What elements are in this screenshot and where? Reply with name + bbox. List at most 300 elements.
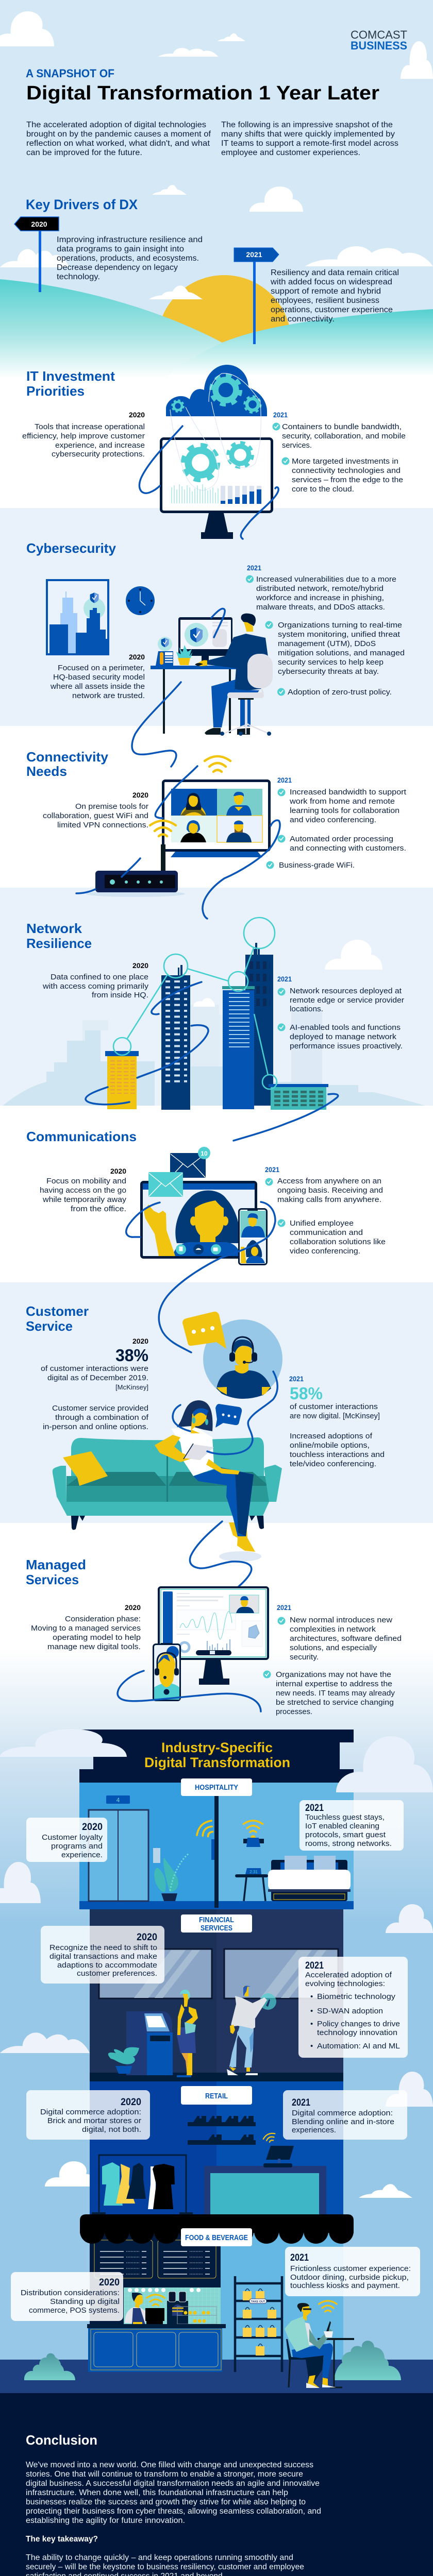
text 2020: 2020 — [110, 1167, 126, 1175]
panel: customer service — [26, 1303, 385, 1562]
heading: Communications — [26, 1129, 137, 1144]
floor: financial services — [90, 1909, 343, 2081]
POS register — [145, 2308, 164, 2324]
text 2021: 2021 — [265, 1166, 279, 1174]
callout: food 2021: touchless kiosks and payment. — [290, 2281, 400, 2290]
callout: financial 2020: Recognize the need to shift to — [49, 1943, 157, 1952]
text 2020: while temporarily away — [42, 1195, 127, 1204]
text 2020: limited VPN connections. — [57, 821, 148, 829]
takeout shelves: TAKE OUT — [251, 2300, 265, 2303]
sofa — [53, 1437, 282, 1530]
heading: Service — [26, 1318, 73, 1334]
signpost 2020: 2020 — [31, 220, 47, 228]
text 2021: performance issues proactively. — [290, 1042, 403, 1050]
body text: businesses realize the success and growth they strive for while also helping to — [26, 2498, 306, 2506]
text 2021: Organizations may not have the — [276, 1670, 391, 1679]
text 2021: remote edge or service provider — [290, 996, 404, 1005]
callout: food 2020: Distribution considerations: — [21, 2289, 120, 2297]
callout: financial 2020: customer preferences. — [77, 1969, 157, 1978]
text 2020: Decrease dependency on legacy — [57, 263, 178, 272]
awning — [80, 2214, 354, 2244]
section title: Digital Transformation — [144, 1755, 290, 1770]
text 2020 — [42, 962, 149, 999]
panel: industry-specific digital transformation — [0, 1729, 433, 2393]
text 2021: core to the cloud. — [292, 485, 354, 494]
callout: hospitality 2021: rooms, strong networks. — [305, 1839, 392, 1848]
text 2021 — [246, 564, 405, 697]
text 2021: 2021 — [273, 411, 288, 419]
body text: securely – will be the keystone to business resiliency, customer and employee — [26, 2563, 304, 2571]
text 2021: with added focus on widespread — [270, 278, 392, 286]
text 2021: connectivity technologies and — [292, 466, 401, 475]
callout: financial 2020: 2020 — [137, 1932, 157, 1943]
text 2021: work from home and remote — [289, 797, 395, 806]
barista — [125, 2293, 145, 2325]
menu boards — [94, 2240, 216, 2278]
text 2021: AI-enabled tools and functions — [290, 1023, 401, 1032]
text 2021: Containers to bundle bandwidth, — [282, 422, 402, 431]
icon: clock — [126, 586, 155, 615]
panel: IT investment priorities — [22, 365, 406, 539]
squiggle: laptop right — [203, 820, 280, 919]
header logo — [351, 28, 407, 52]
callout: food 2021 — [285, 2247, 420, 2296]
icon: wifi router — [150, 821, 176, 836]
cloud over roof left — [0, 1729, 127, 1757]
squiggle: building B — [137, 1025, 208, 1078]
text 2021: distributed network, remote/hybrid — [256, 584, 384, 593]
callout: retail 2020: digital, not both. — [82, 2125, 141, 2134]
text 2021: new needs. IT teams may already — [276, 1689, 395, 1698]
conclusion background — [0, 2393, 433, 2576]
callout: financial 2020: adaptions to accommodate — [57, 1961, 157, 1970]
customer at ATM — [177, 1990, 198, 2077]
text 2021: security. — [290, 1653, 319, 1662]
text 2020: efficiency, help improve customer — [22, 432, 145, 440]
text 2020: data programs to gain insight into — [57, 245, 184, 253]
right hill — [168, 309, 433, 381]
text 2020: through a combination of — [55, 1413, 149, 1422]
laptop video call — [163, 781, 269, 857]
white below hills — [0, 379, 433, 508]
text 2021: employees, resilient business — [271, 296, 379, 305]
tablet video call — [141, 1182, 256, 1257]
phone with shield — [156, 637, 173, 666]
callout: food 2020: 2020 — [99, 2277, 120, 2288]
intro text right: employee and customer experiences. — [221, 148, 360, 157]
text 2020: [McKinsey] — [115, 1383, 148, 1391]
intro text right — [221, 121, 398, 157]
text 2020: 38% — [115, 1346, 148, 1365]
text 2020 — [40, 1167, 127, 1213]
router with antenna — [86, 844, 185, 897]
heading: Resilience — [26, 936, 92, 951]
squiggle: tablet left — [126, 1202, 160, 1237]
intro text left — [26, 121, 211, 157]
text 2020: having access on the go — [40, 1186, 126, 1195]
sun — [157, 275, 291, 409]
text 2020: manage new digital tools. — [47, 1642, 141, 1651]
text 2021: Access from anywhere on an — [277, 1177, 381, 1185]
heading: Managed — [26, 1557, 86, 1572]
wall lamp with wifi — [243, 1821, 264, 1847]
squiggle: sofa to managed services — [190, 1521, 252, 1605]
seated customer with wifi — [285, 2301, 354, 2388]
squiggle: to communications — [234, 1094, 338, 1141]
plant — [176, 645, 192, 665]
text 2021: security services to help keep — [278, 658, 384, 667]
squiggle: IT left — [139, 426, 182, 493]
text 2021 — [270, 268, 399, 324]
cloud — [325, 940, 382, 970]
callout: retail 2020 — [26, 2090, 150, 2140]
section band: customer service — [0, 1282, 433, 1523]
financial services sign: FINANCIAL — [199, 1916, 234, 1924]
callout: retail 2021: experiences. — [292, 2126, 336, 2134]
retail sign: RETAIL — [205, 2092, 228, 2100]
text 2021: New normal introduces new — [290, 1616, 392, 1624]
cloud over sun — [149, 285, 203, 299]
text 2021 — [289, 1375, 385, 1468]
hospitality sign: HOSPITALITY — [195, 1784, 238, 1792]
text 2021: operations, customer experience — [271, 306, 393, 314]
header logo: COMCAST — [351, 28, 407, 41]
eyebrow heading: A SNAPSHOT OF — [26, 67, 114, 80]
customer with phone — [227, 1986, 276, 2075]
monitor with shield — [178, 617, 232, 661]
text 2021 — [277, 975, 404, 1050]
callout: financial 2021: Accelerated adoption of — [305, 1971, 392, 1979]
text 2020: 2020 — [132, 791, 148, 799]
callout: financial 2021: • — [310, 2007, 313, 2015]
envelope dark: 10 — [201, 1150, 208, 1157]
background city skyline — [3, 998, 425, 1106]
text 2020: Moving to a managed services — [31, 1624, 141, 1633]
text 2020: where all assets inside the — [50, 682, 145, 691]
floor: retail — [90, 2081, 343, 2214]
text 2020: Consideration phase: — [65, 1615, 141, 1623]
text 2021: and connectivity. — [271, 315, 335, 324]
intro text right: many shifts that were quickly implemented by — [221, 130, 395, 139]
text 2020: 2020 — [129, 411, 145, 419]
squiggle: woman hair — [173, 1405, 190, 1431]
panel: managed services — [26, 1557, 402, 1716]
text 2020: Focused on a perimeter, — [58, 664, 145, 672]
heading: Customer — [26, 1303, 89, 1319]
text 2021: 2021 — [277, 975, 292, 983]
plant — [154, 1854, 189, 1901]
text 2020: digital as of December 2019. — [47, 1374, 148, 1382]
text 2021: 2021 — [289, 1375, 304, 1383]
callout: financial 2020: digital transactions and make — [49, 1952, 157, 1961]
text 2021: More targeted investments in — [292, 457, 398, 466]
bed — [268, 1856, 351, 1901]
text 2020 — [22, 411, 145, 459]
envelope dark — [170, 1147, 210, 1178]
text 2021: solutions, and especially — [290, 1643, 377, 1652]
callout: retail 2021 — [283, 2090, 407, 2140]
section band: cybersecurity — [0, 508, 433, 726]
clothes rack — [92, 2155, 193, 2214]
elevator: 4 — [116, 1797, 120, 1804]
callout: food 2020: Standing up digital — [50, 2297, 120, 2306]
text 2020: experience, and increase — [55, 441, 145, 450]
body text: stories. One that will continue to transform to enable a stronger, more secure — [26, 2470, 303, 2479]
network connection lines — [113, 918, 277, 1089]
hospitality sign — [181, 1778, 252, 1796]
agent with headset — [203, 1319, 282, 1399]
body text — [26, 2461, 321, 2576]
callout: hospitality 2020: programs and — [51, 1842, 103, 1851]
building roof — [79, 1730, 354, 1783]
section title: Industry-Specific — [161, 1740, 273, 1755]
text 2020: network are trusted. — [72, 691, 145, 700]
squiggle: tablet to customer service — [159, 1202, 275, 1352]
text 2021: services – from the edge to the — [292, 476, 403, 484]
text 2021: learning tools for collaboration — [290, 806, 399, 815]
text 2020: in-person and online options. — [43, 1422, 148, 1431]
post 2021 — [253, 262, 256, 344]
text 2021: and connecting with customers. — [290, 844, 406, 853]
clouds: top group — [0, 11, 433, 267]
body text: digital business. A successful digital transformation needs an agile and innovative — [26, 2479, 320, 2488]
text 2021: Increased adoptions of — [290, 1432, 373, 1440]
text 2020: with access coming primarily — [42, 982, 149, 991]
callout: financial 2021 — [298, 1957, 408, 2058]
post 2020 — [39, 231, 41, 292]
text 2021: Organizations turning to real-time — [278, 621, 402, 630]
text 2020: collaboration, guest WiFi and — [43, 811, 148, 820]
text 2021: Automated order processing — [290, 835, 393, 843]
callout: hospitality 2020 — [26, 1818, 107, 1862]
body text: We've moved into a new world. One filled with change and unexpected success — [26, 2461, 313, 2469]
section title — [144, 1740, 290, 1770]
callout: retail 2020: Digital commerce adoption: — [40, 2108, 141, 2116]
heading: Key Drivers of DX — [26, 197, 138, 212]
main title: Digital Transformation 1 Year Later — [26, 82, 379, 104]
callout: food 2020 — [11, 2272, 123, 2321]
speech bubble blue — [215, 1404, 242, 1428]
text 2020: Customer service provided — [52, 1404, 148, 1413]
callout: hospitality 2020: Customer loyalty — [42, 1833, 103, 1842]
text 2020: Tools that increase operational — [35, 422, 145, 431]
text 2021: 58% — [290, 1384, 323, 1403]
bushes — [24, 2341, 401, 2380]
woman with tablet — [155, 1400, 261, 1562]
squiggle: yellow building — [86, 1087, 129, 1105]
text 2021: Unified employee — [290, 1219, 354, 1228]
callout: hospitality 2020: 2020 — [82, 1822, 103, 1833]
callout: financial 2021: • — [310, 1992, 313, 2001]
text 2021 — [265, 1166, 386, 1256]
text 2021: support of remote and hybrid — [271, 287, 381, 296]
callout: financial 2021: SD-WAN adoption — [317, 2007, 383, 2015]
text 2020: On premise tools for — [75, 802, 148, 811]
callout: hospitality 2021: protocols, smart guest — [305, 1831, 386, 1839]
intro text left: The accelerated adoption of digital technologies — [26, 121, 206, 129]
speech bubble yellow — [182, 1312, 226, 1349]
side table with clock — [235, 1868, 268, 1901]
callout: hospitality 2021: 2021 — [305, 1803, 324, 1814]
panel: connectivity needs — [26, 749, 407, 897]
text 2020: Data confined to one place — [51, 973, 148, 981]
text 2021: communication and — [290, 1228, 363, 1237]
callout: retail 2021: 2021 — [292, 2097, 310, 2108]
callout: food 2021: Frictionless customer experience: — [290, 2264, 411, 2273]
person at desk — [195, 614, 273, 736]
text 2021 — [272, 411, 406, 494]
takeout shelves — [235, 2276, 282, 2372]
text 2020 — [57, 235, 203, 281]
icon: cloud with gears — [166, 365, 267, 416]
heading: Services — [26, 1572, 79, 1587]
pastry case — [177, 2307, 216, 2324]
text 2021: touchless interactions and — [290, 1450, 385, 1459]
callout: retail 2021: Blending online and in-store — [292, 2117, 394, 2126]
financial services sign — [181, 1914, 252, 1933]
panel: communications — [26, 1129, 386, 1264]
text 2021: be stretched to service changing — [276, 1698, 394, 1707]
text 2021: 2021 — [247, 564, 261, 572]
shoe shelves — [188, 2116, 256, 2145]
cloud over roof right — [336, 1736, 433, 1792]
monitor dashboard — [159, 1587, 268, 1685]
ground — [0, 2360, 433, 2393]
callout: financial 2021: Automation: AI and ML — [317, 2042, 400, 2050]
text 2021: tele/video conferencing. — [290, 1460, 376, 1468]
text 2020: 2020 — [132, 1337, 148, 1345]
text 2020: from inside HQ. — [92, 991, 148, 999]
envelope teal — [148, 1172, 183, 1197]
left hill — [0, 279, 289, 379]
intro text right: The following is an impressive snapshot of the — [221, 121, 393, 129]
callout: financial 2021: • — [310, 2020, 313, 2028]
side table with clock: 2:31 — [249, 1870, 258, 1874]
buildings — [105, 943, 328, 1110]
wall sconce with wifi — [194, 1818, 218, 1860]
text 2020: operating model to help — [53, 1633, 141, 1642]
callout: hospitality 2021: IoT enabled cleaning — [305, 1822, 379, 1831]
callout: financial 2021: Biometric technology — [317, 1992, 396, 2001]
clouds white behind building — [45, 1904, 433, 2198]
food and beverage sign: FOOD & BEVERAGE — [185, 2234, 248, 2242]
heading: Cybersecurity — [26, 540, 116, 556]
panel: key drivers of DX — [14, 197, 399, 344]
text 2021: deployed to manage network — [290, 1032, 397, 1041]
squiggle: building A — [152, 982, 202, 1014]
text 2021 — [266, 776, 407, 870]
text 2020: HQ-based security model — [53, 673, 145, 682]
financial services sign: SERVICES — [201, 1924, 232, 1933]
cloud over retail right — [386, 2072, 433, 2107]
heading: IT Investment — [26, 368, 115, 384]
squiggle: managed bottom — [118, 1671, 261, 1711]
text 2021: malware threats, and DDoS attacks. — [256, 603, 385, 612]
icon: wifi top — [205, 756, 230, 772]
text 2021: internal expertise to address the — [276, 1680, 392, 1688]
callout: financial 2021: 2021 — [305, 1960, 324, 1971]
body text: protecting their business from cyber threats, allowing seamless collaboration, and — [26, 2507, 321, 2516]
squiggle: laptop left — [155, 766, 197, 818]
callout: financial 2021: • — [310, 2042, 313, 2050]
text 2021: complexities in network — [290, 1625, 376, 1634]
callout: retail 2020: Brick and mortar stores or — [47, 2116, 141, 2125]
body text: The ability to change quickly – and keep operations running smoothly and — [26, 2553, 293, 2562]
floor: hospitality — [79, 1783, 354, 1909]
text 2020 — [31, 1604, 141, 1651]
text 2020: operations, products, and ecosystems. — [57, 254, 199, 263]
food and beverage sign — [181, 2228, 252, 2246]
callout: financial 2021: technology innovation — [317, 2028, 397, 2037]
text 2020: Improving infrastructure resilience and — [57, 235, 203, 244]
text 2021: architectures, software defined — [290, 1634, 402, 1643]
text 2021: processes. — [276, 1707, 312, 1716]
heading: Priorities — [26, 383, 85, 399]
smartphone — [239, 1209, 267, 1264]
text 2021: Network resources deployed at — [290, 987, 402, 995]
POS terminal with wifi — [262, 2131, 294, 2167]
background: sky continuation — [0, 1927, 433, 2360]
text 2021: Increased vulnerabilities due to a more — [256, 575, 396, 584]
callout: hospitality 2021 — [299, 1800, 404, 1851]
callout: food 2021: 2021 — [290, 2252, 309, 2263]
text 2020: 2020 — [125, 1604, 141, 1612]
callout: financial 2021: evolving technologies: — [305, 1979, 385, 1988]
text 2021: Resiliency and data remain critical — [271, 268, 399, 277]
text 2021: of customer interactions — [290, 1402, 378, 1411]
text 2021: 2021 — [277, 776, 292, 784]
text 2021: workforce and increase in phishing, — [256, 594, 384, 602]
text 2021: and video conferencing. — [290, 816, 376, 824]
ATM — [126, 2011, 173, 2075]
hanging lamps — [128, 2288, 201, 2292]
pole — [214, 1796, 219, 1908]
callout: financial 2020 — [41, 1926, 164, 1984]
text 2021: Adoption of zero-trust policy. — [288, 688, 392, 697]
coffee machine — [167, 2292, 188, 2324]
text 2021: services. — [282, 441, 312, 450]
text 2021: locations. — [290, 1005, 323, 1013]
text 2021: security, collaboration, and mobile — [282, 432, 406, 440]
callout: food 2020: commerce, POS systems. — [29, 2306, 120, 2315]
signpost 2021: 2021 — [246, 250, 262, 259]
text 2021: mitigation solutions, and managed — [278, 649, 405, 657]
text 2020: from the office. — [71, 1205, 126, 1213]
text 2021: collaboration solutions like — [290, 1238, 386, 1246]
heading: Conclusion — [26, 2432, 97, 2448]
heading: Connectivity — [26, 749, 109, 765]
background: lower sky gradient — [0, 1649, 433, 1927]
text 2020: of customer interactions were — [41, 1364, 148, 1373]
panel: conclusion — [0, 2393, 433, 2576]
text 2021: Business-grade WiFi. — [279, 861, 355, 870]
text 2020: 2020 — [132, 962, 148, 970]
elevator — [89, 1795, 160, 1901]
callout: retail 2021: Digital commerce adoption: — [292, 2109, 393, 2117]
signpost 2020 — [14, 217, 59, 231]
clouds behind building — [0, 1862, 90, 2053]
body text: establishing the agility for future innovation. — [26, 2516, 185, 2525]
checkout counter — [204, 2166, 326, 2214]
signpost 2021 — [234, 248, 279, 262]
squiggle: cyber to connectivity — [132, 682, 181, 767]
pillow — [63, 1451, 108, 1486]
retail sign — [181, 2086, 252, 2105]
heading: Needs — [26, 764, 67, 779]
squiggle: monitor hook — [211, 608, 225, 637]
section band: network resilience — [0, 888, 433, 1106]
callout: hospitality 2020: experience. — [61, 1851, 103, 1859]
